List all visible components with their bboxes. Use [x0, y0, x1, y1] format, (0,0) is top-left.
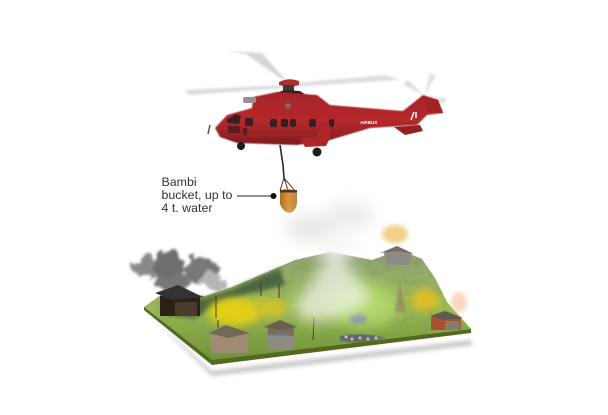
houses — [155, 246, 463, 353]
cabin windows — [270, 119, 334, 127]
label text: Bambi — [162, 175, 197, 189]
platform edge — [144, 307, 471, 365]
house: front centre — [266, 330, 296, 350]
ground shadow — [146, 312, 472, 376]
landscape block — [144, 244, 471, 365]
dark smoke — [133, 252, 227, 291]
label text: 4 t. water — [162, 201, 212, 215]
rotor hub — [279, 79, 299, 86]
rock patches — [340, 334, 385, 342]
sponson — [300, 124, 330, 147]
fuselage — [215, 92, 443, 145]
wheels — [237, 142, 245, 150]
cable — [280, 145, 284, 178]
leader line — [237, 195, 273, 197]
water spray mist on hill — [292, 244, 372, 322]
house: front centre back — [264, 320, 297, 336]
main rotor blades — [184, 51, 400, 95]
water spray cloud — [286, 200, 374, 256]
dark forest shadow on slope — [165, 268, 285, 318]
tail stabiliser — [394, 125, 423, 135]
engine intake — [243, 97, 256, 103]
bucket label — [162, 175, 276, 215]
label text: bucket, up to — [162, 188, 233, 202]
terrain — [144, 250, 471, 360]
tail rotor — [403, 73, 446, 112]
house: top of hill — [380, 246, 414, 265]
tail markings: AIRBUS — [360, 120, 377, 125]
house: dark left — [155, 285, 203, 316]
flames — [382, 225, 467, 312]
helicopter — [184, 51, 446, 156]
house: right red — [430, 311, 463, 330]
burning yellow grass — [208, 298, 262, 326]
terrain mottling — [144, 250, 471, 360]
wet green valley — [331, 283, 399, 327]
icon: Bambi bucket — [280, 178, 297, 213]
trees — [216, 282, 314, 340]
house: front left — [209, 325, 250, 353]
cockpit windows — [226, 114, 241, 124]
